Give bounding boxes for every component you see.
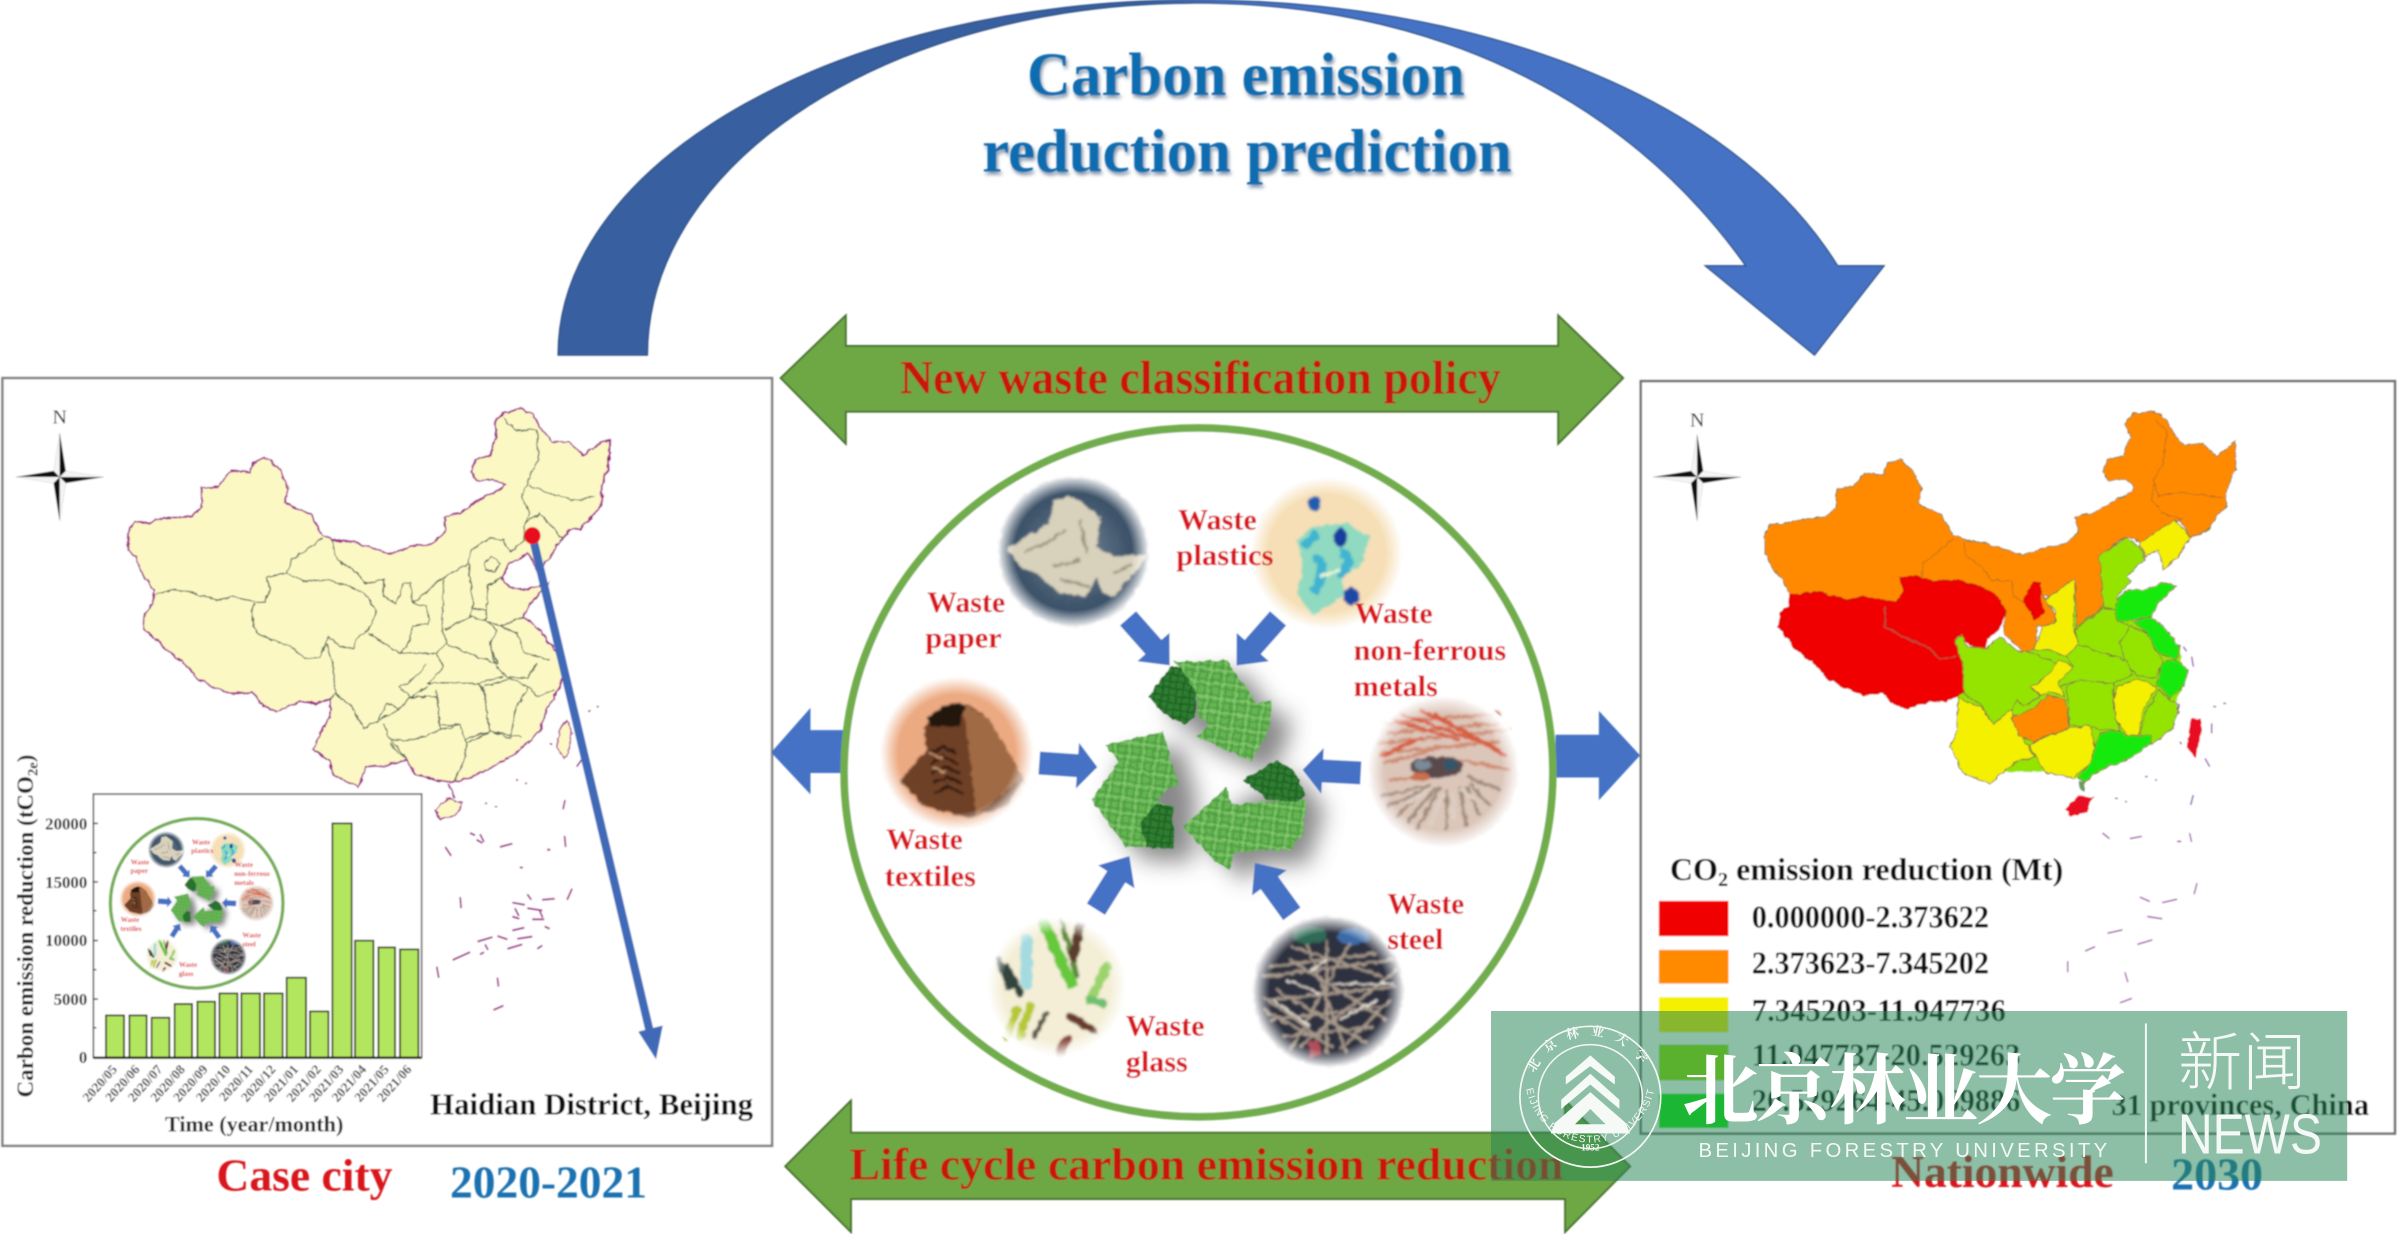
chart x axis labels: 2020/06: [102, 1062, 143, 1105]
legend class: second: [1659, 944, 1989, 984]
banner: NEWS: NEWS: [2178, 1103, 2322, 1166]
chart x axis labels: 2020/11: [216, 1062, 256, 1104]
legend title: emission reduction (Mt): [1728, 852, 2063, 887]
caption: nationwide: Nationwide: [1891, 1146, 2114, 1197]
label: waste plastics: Waste: [1178, 505, 1257, 537]
compass: case city: N: [53, 406, 67, 428]
marker: Beijing dot: [524, 527, 541, 544]
chart inset: mini recycling diagram: Waste: [121, 916, 139, 924]
chart inset: mini recycling diagram: Waste: [131, 858, 149, 866]
label: waste paper: Waste: [927, 587, 1005, 619]
panel: case city: [2, 378, 772, 1146]
chart baseline: [93, 1057, 422, 1059]
banner: Chinese university name: 北京林业大学: [1682, 1029, 2126, 1139]
chart x axis labels: 2021/06: [374, 1062, 415, 1105]
map: China with Beijing marked: [128, 408, 610, 819]
label: waste textiles: textiles: [885, 861, 976, 893]
legend class: highest: 20.529264-45.069886: [1752, 1082, 2020, 1118]
chart inset: mini recycling diagram: glass: [179, 970, 194, 978]
chart y axis title: ): [13, 755, 38, 762]
chart x axis labels: 2021/02: [283, 1062, 324, 1105]
compass: nationwide: [1653, 409, 1742, 521]
chart inset: mini recycling diagram: Waste: [192, 838, 210, 846]
logo: university seal: BEIJING FORESTRY UNIVERSITY: [1526, 1088, 1654, 1143]
legend class: lowest: 0.000000-2.373622: [1752, 899, 1989, 935]
chart x axis labels: 2020/05: [79, 1062, 120, 1105]
chart inset: mini recycling diagram: steel: [242, 940, 256, 948]
banner: English university name: BEIJING FORESTRY UNIVERSITY: [1699, 1140, 2108, 1162]
chart inset: mini recycling diagram: non-ferrous: [234, 870, 270, 878]
label: waste paper: paper: [925, 622, 1002, 654]
chart y axis labels: 10000: [45, 931, 87, 950]
label: waste textiles: [885, 824, 976, 893]
arrow: life cycle carbon emission reduction: [785, 1101, 1630, 1232]
chart x axis labels: 2020/10: [193, 1062, 234, 1105]
legend class: third: [1659, 992, 2006, 1032]
caption: 2020-2021: 2020-2021: [450, 1157, 647, 1208]
map: South China Sea islands: [437, 833, 572, 1010]
chart x axis labels: 2021/04: [329, 1062, 369, 1105]
label: waste non-ferrous metals: metals: [1354, 671, 1438, 703]
arrow: left to case city: [771, 708, 847, 794]
curved blue arrow: [558, 0, 1884, 355]
map: provinces coloured by reduction: [1765, 412, 2237, 817]
arrow: life cycle carbon emission reduction: Life cycle carbon emission reduction: [849, 1138, 1564, 1189]
legend class: highest: [1659, 1082, 2020, 1128]
compass: case city: [15, 406, 104, 521]
text: Haidian District: Haidian District, Beijing: [430, 1087, 753, 1121]
panel: nationwide: [1641, 381, 2395, 1134]
legend class: fourth: 11.947737-20.529263: [1752, 1037, 2020, 1073]
chart frame: [93, 794, 422, 1057]
chart x axis labels: 2020/09: [170, 1062, 211, 1105]
panel: waste recycling circle: [844, 428, 1553, 1117]
label: waste plastics: [1176, 505, 1273, 572]
arrow: Beijing to Haidian: [532, 536, 663, 1059]
label: waste paper: [925, 587, 1005, 654]
chart inset: mini recycling diagram: Waste: [242, 932, 261, 940]
chart inset: mini recycling diagram: Waste: [179, 961, 197, 969]
legend class: third: 7.345203-11.947736: [1752, 992, 2006, 1028]
text: 31 provinces: 31 provinces, China: [2111, 1088, 2369, 1122]
chart x axis labels: 2021/03: [306, 1062, 347, 1105]
chart inset: mini recycling diagram: metals: [234, 879, 254, 887]
label: waste textiles: Waste: [886, 824, 963, 856]
map: South China Sea islands: [2068, 833, 2197, 1003]
legend class: lowest: [1659, 899, 1989, 936]
banner: Chinese news: 新闻: [2178, 1010, 2307, 1104]
chart x axis labels: 2020/07: [125, 1062, 166, 1105]
chart x axis labels: 2021/05: [351, 1062, 392, 1105]
compass: nationwide: N: [1690, 409, 1704, 431]
legend title: CO: [1670, 852, 1717, 887]
label: waste non-ferrous metals: Waste: [1355, 598, 1433, 630]
logo: university seal: 1952: [1581, 1142, 1600, 1152]
chart inset: mini recycling diagram: plastics: [191, 847, 214, 855]
chart inset: mini recycling diagram: textiles: [120, 925, 142, 933]
chart x axis title: Time (year/month): [165, 1112, 343, 1137]
chart inset: mini recycling diagram: paper: [130, 867, 148, 875]
chart y axis labels: 0: [79, 1048, 87, 1067]
chart y axis title: 2e: [25, 762, 42, 776]
chart y axis title: Carbon emission reduction (tCO: [13, 777, 38, 1097]
legend class: fourth: [1659, 1037, 2020, 1080]
chart x axis labels: 2020/08: [147, 1062, 188, 1105]
chart x axis labels: 2020/12: [238, 1062, 279, 1105]
caption: 2030: 2030: [2171, 1148, 2263, 1199]
legend class: second: 2.373623-7.345202: [1752, 944, 1989, 980]
label: waste non-ferrous metals: [1354, 598, 1506, 703]
title: carbon emission reduction prediction: reduction prediction: [982, 117, 1512, 185]
chart y axis labels: 20000: [45, 814, 87, 833]
chart ticks: [93, 823, 98, 1028]
label: waste glass: Waste: [1126, 1010, 1205, 1042]
logo: university seal: [1519, 1024, 1662, 1168]
logo: university seal: 北京林业大学: [1527, 1024, 1648, 1072]
banner: Beijing Forestry University News watermark: [1491, 1010, 2348, 1181]
chart x axis labels: [79, 1062, 415, 1105]
label: waste non-ferrous metals: non-ferrous: [1354, 635, 1506, 667]
chart y axis labels: [45, 814, 87, 1067]
chart inset: mini recycling diagram: Waste: [235, 861, 253, 869]
bar chart: monthly carbon emission reduction: [13, 755, 422, 1137]
legend title: 2: [1718, 869, 1728, 891]
arrow: new waste classification policy: [781, 315, 1623, 444]
chart bars: [106, 823, 418, 1057]
label: waste glass: glass: [1126, 1046, 1188, 1078]
title: carbon emission reduction prediction: [982, 41, 1512, 185]
legend: CO2 emission reduction: [1659, 852, 2063, 1128]
label: waste plastics: plastics: [1176, 540, 1273, 572]
arrow: new waste classification policy: New waste classification policy: [900, 352, 1501, 404]
caption: case city: Case city: [216, 1149, 392, 1200]
chart x axis labels: 2021/01: [261, 1062, 301, 1105]
title: carbon emission reduction prediction: Carbon emission: [1027, 41, 1465, 109]
label: waste steel: Waste: [1387, 888, 1464, 920]
label: waste steel: [1387, 888, 1464, 956]
label: waste steel: steel: [1387, 924, 1443, 956]
chart y axis labels: 5000: [54, 990, 87, 1009]
banner: divider: [2145, 1023, 2147, 1163]
chart y axis labels: 15000: [45, 873, 87, 892]
label: waste glass: [1126, 1010, 1205, 1078]
chart inset: mini recycling diagram: [110, 819, 283, 988]
recycling graphics: [877, 472, 1523, 1071]
arrow: right to nationwide: [1556, 711, 1640, 800]
